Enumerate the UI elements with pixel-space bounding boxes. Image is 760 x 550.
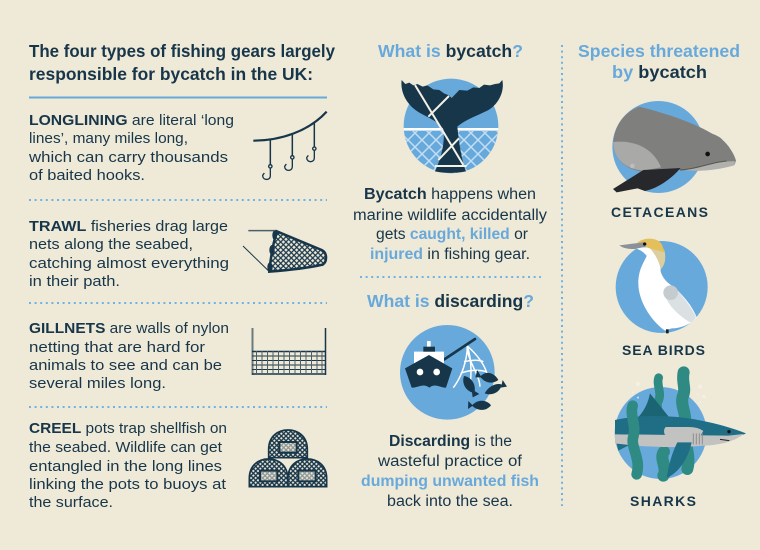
icon: whale tail in net <box>401 79 503 173</box>
text block: discarding definition: Discarding is the <box>389 433 512 450</box>
text block: trawl: TRAWL fisheries drag large <box>29 218 228 235</box>
text block: gillnets <box>29 320 229 392</box>
text block: creel: the surface. <box>29 494 113 511</box>
label: sharks: SHARKS <box>630 493 696 509</box>
label: cetaceans: CETACEANS <box>611 204 708 220</box>
text block: gillnets: animals to see and can be <box>29 357 222 374</box>
heading: four types of fishing gears: The four types of fishing gears largely <box>29 41 335 61</box>
heading: species threatened by bycatch: Species threatened <box>578 41 740 61</box>
text block: bycatch definition <box>353 186 547 263</box>
panel: what is discarding <box>361 291 539 510</box>
heading: species threatened by bycatch: by bycatch <box>612 62 707 82</box>
text block: trawl: catching almost everything <box>29 255 229 272</box>
text block: creel: the seabed. Wildlife can get <box>29 439 223 456</box>
text block: creel: entangled in the long lines <box>29 458 222 475</box>
text block: longlining <box>28 112 234 184</box>
text block: discarding definition: wasteful practice of <box>377 453 523 470</box>
text block: longlining: which can carry thousands <box>28 149 228 166</box>
heading: species threatened by bycatch <box>578 41 740 82</box>
icon: creel pots <box>249 430 327 487</box>
text block: longlining: LONGLINING are literal ‘long <box>29 112 234 129</box>
icon: shark and seaweed <box>615 372 746 479</box>
icon: porpoise <box>612 101 736 193</box>
text block: longlining: lines’, many miles long, <box>29 130 188 147</box>
icon: boat discarding fish <box>400 325 507 420</box>
text block: trawl <box>29 218 229 290</box>
icon: gillnet <box>252 328 326 375</box>
heading: what is bycatch: What is bycatch? <box>378 41 523 61</box>
text block: bycatch definition: marine wildlife accidentally <box>353 207 547 224</box>
panel: what is bycatch <box>353 41 547 277</box>
text block: creel: linking the pots to buoys at <box>29 476 227 493</box>
panel: species threatened <box>578 41 746 509</box>
text block: creel: CREEL pots trap shellfish on <box>29 420 227 437</box>
text block: discarding definition <box>361 433 539 510</box>
label: sea birds: SEA BIRDS <box>622 342 705 358</box>
text block: longlining: of baited hooks. <box>29 167 145 184</box>
icon: gannet <box>616 239 708 333</box>
text block: bycatch definition: gets caught, killed or <box>376 226 528 243</box>
heading: four types of fishing gears: responsible for bycatch in the UK: <box>29 64 313 84</box>
heading: four types of fishing gears <box>29 41 335 84</box>
heading: what is discarding: What is discarding? <box>367 291 534 311</box>
panel: fishing gear types <box>28 41 335 511</box>
text block: trawl: nets along the seabed, <box>29 236 193 253</box>
icon: trawl net <box>243 231 326 272</box>
text block: bycatch definition: injured in fishing gear. <box>370 246 530 263</box>
text block: discarding definition: dumping unwanted fish <box>361 473 539 490</box>
text block: trawl: in their path. <box>29 273 120 290</box>
text block: gillnets: netting that are hard for <box>29 339 205 356</box>
text block: gillnets: GILLNETS are walls of nylon <box>29 320 229 337</box>
text block: gillnets: several miles long. <box>29 375 166 392</box>
icon: longline hooks <box>253 112 327 179</box>
text block: bycatch definition: Bycatch happens when <box>364 186 536 203</box>
text block: discarding definition: back into the sea. <box>387 493 513 510</box>
text block: creel <box>29 420 227 511</box>
